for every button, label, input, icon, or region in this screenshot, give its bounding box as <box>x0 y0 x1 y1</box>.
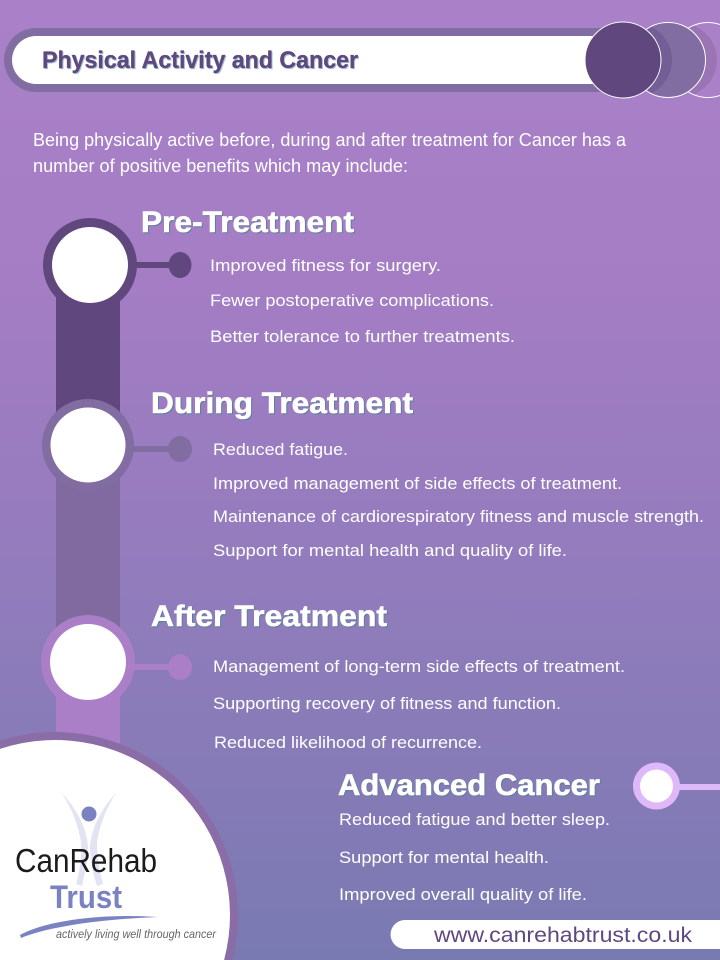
heading: After Treatment <box>151 600 387 633</box>
decorative circle: dark <box>585 22 661 98</box>
banner white panel <box>12 36 610 84</box>
section: advanced cancer <box>338 762 720 904</box>
decorative circle shadow: light <box>689 26 717 94</box>
benefit list: Reduced fatigue. <box>213 440 348 459</box>
section: after treatment <box>41 600 625 752</box>
heading: Pre-Treatment <box>141 206 354 239</box>
logo sub-wordmark: Trust <box>50 879 122 915</box>
header banner <box>4 22 720 98</box>
benefit list: Support for mental health. <box>339 848 549 867</box>
section: during treatment <box>42 387 704 560</box>
decorative circle: light <box>670 23 720 98</box>
heading: Advanced Cancer <box>338 769 600 802</box>
section: pre-treatment <box>43 206 515 346</box>
intro text: number of positive benefits which may include: <box>33 156 408 176</box>
icon: figure with raised arms <box>61 792 117 886</box>
decorative circle: medium <box>630 22 706 98</box>
heading: During Treatment <box>151 387 413 420</box>
column segment: after <box>56 640 120 760</box>
pill background <box>391 920 720 949</box>
logo panel <box>0 732 238 960</box>
benefit list: Fewer postoperative complications. <box>210 291 494 310</box>
benefit list: Maintenance of cardiorespiratory fitness and muscle strength. <box>213 507 704 526</box>
column segment: during <box>56 445 120 640</box>
timeline node <box>42 399 192 491</box>
logo tagline: actively living well through cancer <box>56 927 217 941</box>
benefit list: Support for mental health and quality of life. <box>213 541 567 560</box>
decorative circle shadow: medium <box>646 27 672 93</box>
benefit list <box>339 810 610 904</box>
logo circle <box>0 740 230 960</box>
benefit list: Improved overall quality of life. <box>339 885 587 904</box>
benefit list: Improved fitness for surgery. <box>210 256 441 275</box>
column segment: pre <box>56 265 120 425</box>
benefit list: Supporting recovery of fitness and function. <box>213 694 561 713</box>
benefit list: Reduced fatigue and better sleep. <box>339 810 610 829</box>
benefit list <box>213 440 704 560</box>
benefit list <box>210 256 515 346</box>
logo swoosh <box>20 916 158 938</box>
timeline node <box>43 218 192 312</box>
website pill <box>391 920 720 949</box>
intro text: Being physically active before, during and after treatment for Cancer has a <box>33 130 627 150</box>
timeline node <box>41 615 192 709</box>
timeline column <box>56 265 120 760</box>
logo wordmark: CanRehab <box>15 842 157 879</box>
intro text <box>33 130 627 176</box>
timeline node <box>633 762 720 810</box>
banner pill <box>4 28 640 92</box>
benefit list: Improved management of side effects of treatment. <box>213 474 622 493</box>
benefit list: Better tolerance to further treatments. <box>210 327 515 346</box>
title: Physical Activity and Cancer <box>42 47 358 74</box>
benefit list: Management of long-term side effects of treatment. <box>213 657 625 676</box>
benefit list: Reduced likelihood of recurrence. <box>214 733 482 752</box>
website url: www.canrehabtrust.co.uk <box>433 924 693 947</box>
benefit list <box>213 657 625 752</box>
logo circle border <box>0 732 238 960</box>
